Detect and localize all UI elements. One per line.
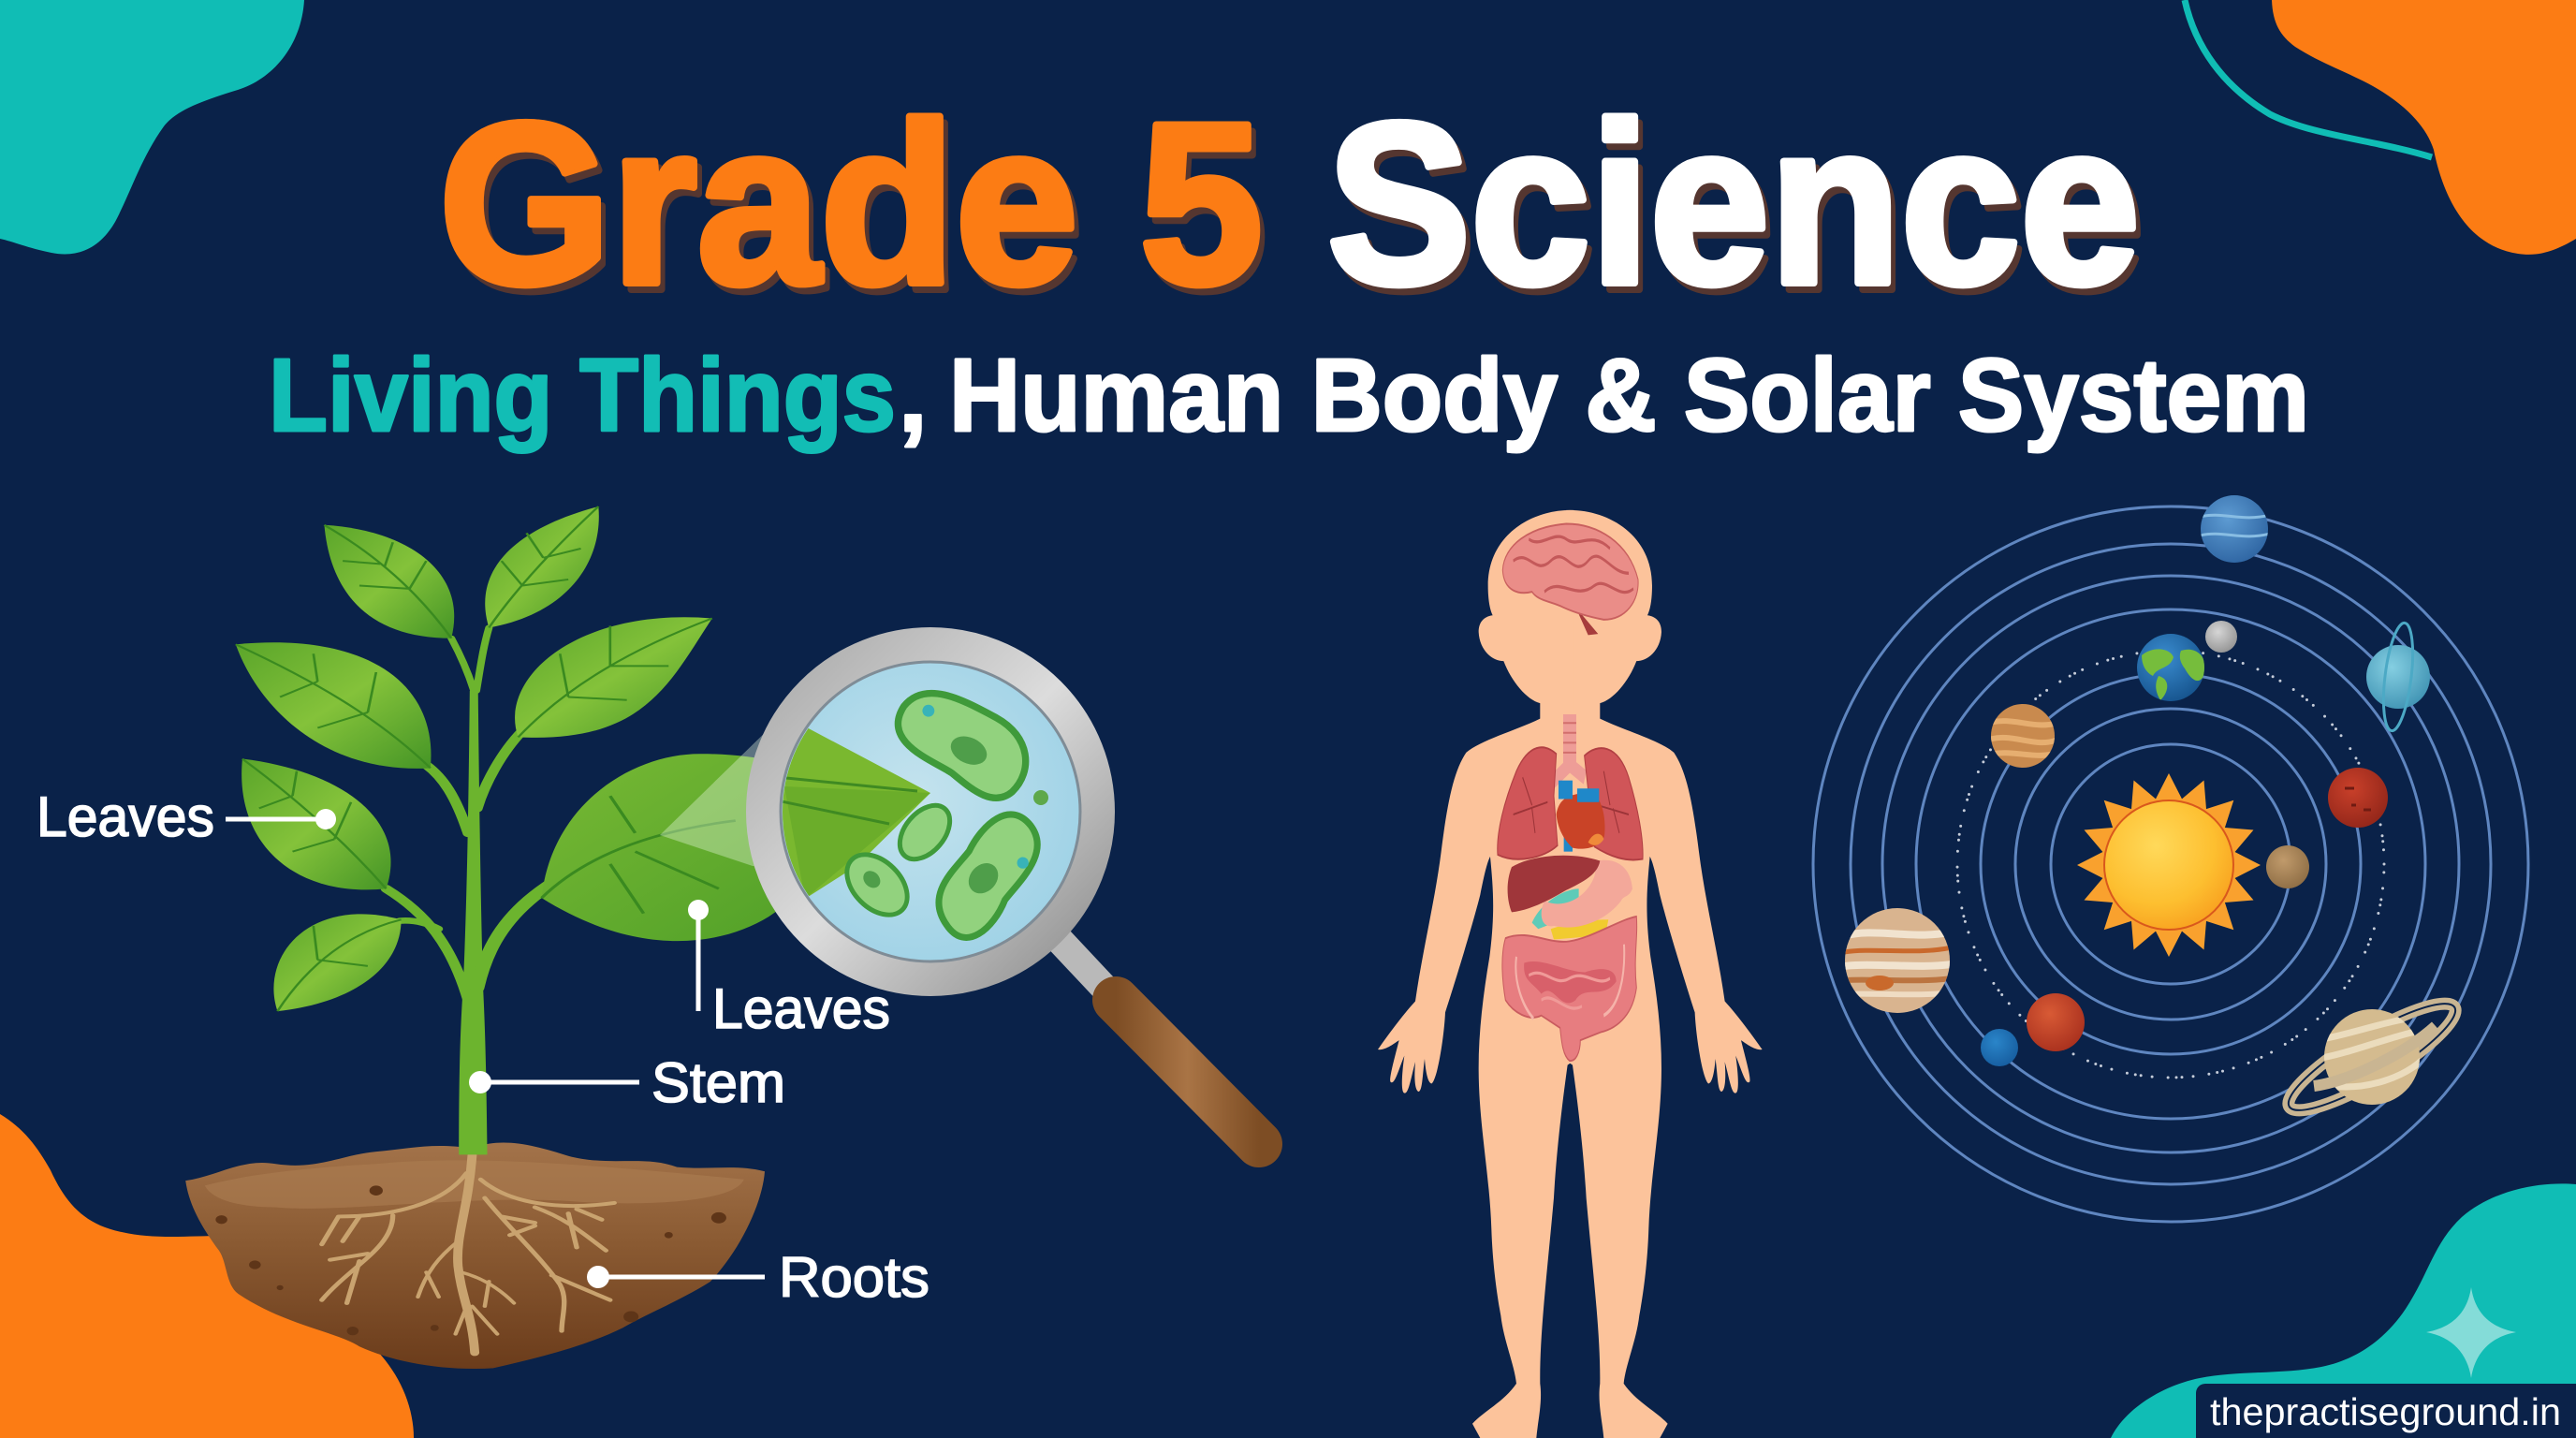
- accent: teal curve top right: [2185, 0, 2432, 157]
- label: Roots: [587, 1246, 929, 1309]
- planet: Mercury: [2266, 845, 2309, 888]
- lens contents: [783, 689, 1048, 941]
- orbit rings: [1813, 506, 2528, 1222]
- organ: lungs: [1498, 747, 1643, 859]
- asteroid belt: [1957, 651, 2384, 1078]
- subtitle: [269, 338, 2309, 453]
- icon: sparkle star: [2426, 1287, 2516, 1378]
- body silhouette left half: [1378, 510, 1573, 1438]
- zoomed leaf wedge: [783, 728, 930, 897]
- leaf: top right: [485, 506, 599, 627]
- leaf: left lower: [242, 759, 391, 889]
- subtitle: Human Body and Solar System: Human Body & Solar System: [949, 338, 2309, 453]
- label: Leaves centre: Leaves: [712, 977, 890, 1040]
- roots: [322, 1154, 614, 1353]
- blob: bottom-left orange: [0, 1114, 414, 1438]
- subtitle: comma: ,: [899, 338, 928, 453]
- blob: top-left teal: [0, 0, 304, 254]
- stems: [387, 627, 668, 1154]
- planet: Uranus: [2366, 622, 2430, 732]
- main stem tapered: [459, 691, 488, 1154]
- planet: small blue world: [1981, 1029, 2018, 1066]
- frame inner rim: [781, 662, 1080, 961]
- subtitle: Living Things: Living Things: [269, 338, 896, 453]
- label: Stem: [469, 1051, 785, 1114]
- body silhouette right half: [1566, 510, 1763, 1438]
- planet: Earth: [2137, 634, 2205, 701]
- organ: trachea: [1547, 714, 1585, 786]
- organ: liver: [1508, 856, 1600, 912]
- label: Leaves left: [37, 785, 336, 848]
- label: Leaves left: Leaves: [37, 785, 214, 848]
- magnifying glass: [660, 645, 1259, 1144]
- organ: intestines: [1502, 917, 1637, 1061]
- blob: top-right orange: [2272, 0, 2576, 255]
- planet: Moon: [2205, 621, 2237, 653]
- planet: Neptune: [2200, 495, 2270, 563]
- leaf: left middle: [236, 642, 431, 769]
- soil pebbles: [215, 1185, 726, 1335]
- sun: [2077, 773, 2261, 957]
- title: Science: Science: [1327, 75, 2140, 331]
- magnifier handle: [1116, 1000, 1259, 1144]
- plant illustration: [185, 506, 836, 1369]
- magnifier beam: [660, 726, 899, 880]
- magnifier frame: [764, 645, 1097, 978]
- organ: heart: [1557, 781, 1605, 852]
- planet: Saturn: [2282, 998, 2462, 1116]
- leaf: right middle: [515, 617, 712, 738]
- soil mound: [185, 1142, 765, 1369]
- planet: Jupiter: [1844, 908, 1952, 1013]
- magnifier lens: [782, 663, 1079, 961]
- magnifier neck: [1056, 936, 1114, 998]
- plant cell large bottom: [935, 811, 1041, 941]
- planet: Mars: [2328, 768, 2388, 828]
- branch stems: [387, 627, 668, 1000]
- soil highlight: [205, 1160, 744, 1209]
- plant cell small middle: [897, 803, 953, 861]
- organ: stomach and pancreas: [1532, 860, 1632, 939]
- label: Leaves centre: [688, 900, 890, 1040]
- organ: brain: [1502, 523, 1638, 635]
- leaf: top left: [324, 525, 454, 638]
- solar system: [1813, 495, 2528, 1222]
- blob: bottom-right teal: [2111, 1183, 2576, 1438]
- plant cell large top: [895, 689, 1030, 801]
- floating cell dot: [1033, 790, 1048, 805]
- human body: [1378, 510, 1763, 1438]
- title: Grade 5: Grade 5: [439, 75, 1263, 331]
- watermark badge: thepractiseground.in: [2210, 1390, 2561, 1433]
- leaf: large magnified leaf: [542, 754, 836, 941]
- label: Roots: Roots: [779, 1246, 929, 1309]
- planet: red world: [2027, 993, 2085, 1051]
- planet: Venus: [1989, 704, 2057, 768]
- leaf: bottom left: [273, 914, 402, 1011]
- plant cell small bottom: [844, 852, 910, 917]
- label: Stem: Stem: [651, 1051, 785, 1114]
- title: [439, 75, 2140, 331]
